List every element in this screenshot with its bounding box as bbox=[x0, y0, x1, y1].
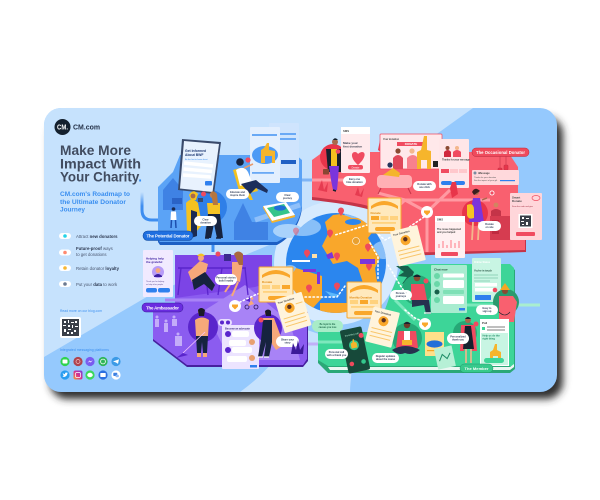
donation form: top bbox=[368, 198, 401, 233]
background card bbox=[44, 108, 557, 392]
green callout bubble: causes you love bbox=[319, 327, 337, 329]
bubble: map: journey bbox=[282, 197, 293, 200]
bubble: form: sign up bbox=[483, 310, 492, 313]
bubble: form: Easy to bbox=[483, 307, 492, 310]
crowd silhouettes bbox=[155, 316, 182, 346]
card: helping help bbox=[143, 250, 173, 297]
bubble: map: Clear bbox=[284, 194, 291, 197]
message card: Thanks for your donation bbox=[474, 176, 496, 179]
woman with hat bbox=[493, 283, 519, 322]
bubble: sofa: Donate with bbox=[417, 183, 432, 186]
globe halo bbox=[274, 201, 398, 325]
card shadow bbox=[50, 117, 563, 399]
bubble: sofa bbox=[413, 181, 436, 191]
panel: the member bbox=[318, 258, 519, 373]
shop counter bbox=[490, 203, 510, 240]
phone card: donation bbox=[439, 139, 471, 188]
green callout bubble: Be loyal to the bbox=[320, 323, 336, 326]
bubble: ambassador bbox=[276, 336, 299, 347]
message card: iMessage bbox=[478, 171, 490, 175]
donor with bag bbox=[320, 138, 346, 191]
road bbox=[165, 298, 235, 302]
messaging platform icons bbox=[60, 357, 121, 380]
title: Impact With bbox=[60, 156, 141, 171]
panel: potential donator bbox=[158, 123, 303, 245]
card: first donation: Donate bbox=[352, 166, 360, 170]
bubble: form bbox=[476, 305, 498, 315]
plant bbox=[396, 266, 414, 284]
plants bbox=[318, 140, 388, 197]
campaign cards bbox=[250, 123, 299, 183]
panel: occasional donator bbox=[312, 127, 542, 258]
icon: rcs bbox=[73, 357, 83, 366]
bubble: form bbox=[194, 216, 217, 226]
icon: twitter bbox=[60, 370, 70, 380]
smart donate card: Scan the code and give bbox=[512, 205, 534, 208]
toggle pill bbox=[218, 319, 232, 326]
donors in conversation bbox=[186, 191, 223, 238]
road bbox=[318, 300, 515, 342]
bubble: table: build loyalty bbox=[219, 280, 234, 282]
message card: See the impact of your gift bbox=[474, 179, 498, 182]
card: bottom SMS: and you helped bbox=[437, 231, 456, 234]
phone call bbox=[340, 326, 371, 374]
green note bbox=[434, 345, 456, 370]
title: Make More bbox=[60, 143, 131, 158]
label: the member bbox=[460, 364, 493, 372]
globe bbox=[286, 208, 386, 313]
profile card: left: Your Donation bbox=[277, 297, 295, 305]
card: bottom SMS: The issue happened bbox=[437, 228, 462, 231]
campaign poster: Your donation bbox=[383, 138, 400, 141]
volunteer with broom bbox=[176, 308, 218, 358]
clouds bbox=[286, 214, 386, 272]
bubble: ambassador: Share your bbox=[281, 338, 294, 342]
icon: whatsapp bbox=[98, 357, 108, 366]
roads bbox=[312, 180, 541, 252]
title: Your Charity. bbox=[60, 170, 142, 184]
campaign poster: DONATE bbox=[405, 142, 417, 146]
title bbox=[60, 143, 142, 184]
seated phone man bbox=[402, 274, 432, 314]
bubble: mobile: Donate bbox=[485, 223, 494, 226]
subtitle bbox=[60, 191, 130, 213]
card: helping help: the grateful bbox=[146, 260, 163, 264]
label: the occasional donator bbox=[472, 148, 529, 156]
message card bbox=[472, 170, 519, 185]
continent: africa and eurasia bbox=[322, 214, 380, 288]
bubble: form: Clear bbox=[202, 218, 209, 222]
small walking person bbox=[170, 207, 176, 228]
heart badge: bottom bbox=[419, 318, 431, 330]
continent: south bbox=[320, 303, 346, 313]
reclining donor on sofa bbox=[377, 162, 412, 194]
cyclist bbox=[245, 296, 258, 309]
donation form: monthly bbox=[347, 282, 381, 318]
goal: future-proof: Future-proof ways bbox=[76, 246, 113, 251]
QR code bbox=[60, 317, 81, 338]
seated donor bbox=[233, 157, 268, 200]
label: the potential donator: The Potential Donator bbox=[146, 234, 190, 239]
goal: retain: Retain donator loyalty bbox=[76, 266, 120, 271]
bubble: reading: about the cause bbox=[376, 358, 396, 361]
woman in red jacket bbox=[453, 317, 478, 363]
bubble: reading bbox=[372, 353, 399, 363]
bubble: phone: with a thank you bbox=[327, 354, 347, 357]
bubble: first donation bbox=[343, 176, 366, 186]
form tablet bbox=[178, 139, 221, 194]
subtitle: CM.com's Roadmap to bbox=[60, 191, 130, 198]
mountain bbox=[205, 285, 300, 360]
bubble: phone bbox=[325, 349, 348, 359]
card: poll: Help us do the bbox=[482, 334, 500, 338]
form card bbox=[472, 258, 501, 302]
bubble: story: Educate and bbox=[230, 191, 245, 194]
profile card: top: Your Donation bbox=[393, 230, 410, 237]
bubble: story: inspire them bbox=[230, 194, 246, 197]
goal: data: Put your data to work bbox=[76, 282, 118, 287]
goal: future-proof: to get donations bbox=[76, 252, 107, 257]
inland sea bbox=[345, 219, 361, 225]
chat card: Become an advocate bbox=[225, 328, 250, 330]
dotted journey paths bbox=[236, 217, 424, 322]
smart donate card bbox=[510, 193, 542, 240]
label: the member: The Member bbox=[464, 366, 489, 371]
goal list bbox=[59, 233, 120, 287]
small figure on road bbox=[450, 182, 458, 198]
campaign poster bbox=[380, 134, 442, 169]
label: the occasional donator: The Occasional Donator bbox=[476, 150, 525, 155]
logo: CM.com bbox=[73, 123, 100, 132]
chat card bbox=[222, 325, 259, 369]
platforms heading: Integrated messaging platforms bbox=[60, 348, 109, 352]
plant bbox=[291, 340, 304, 354]
icon: google business bbox=[98, 370, 108, 380]
icon: instagram bbox=[74, 370, 82, 380]
card: first donation bbox=[341, 127, 370, 173]
profile card: top bbox=[390, 225, 426, 267]
bubble: poster: thank-you bbox=[452, 338, 464, 342]
icon: imessage bbox=[85, 370, 95, 380]
card: helping help: us help other people bbox=[146, 283, 163, 286]
map pins bbox=[293, 208, 372, 293]
profile card: left bbox=[275, 292, 312, 333]
logo: CM. bbox=[57, 124, 68, 132]
bubble: story bbox=[226, 189, 249, 199]
goal: future-proof bbox=[59, 246, 113, 257]
green callout bubble bbox=[312, 320, 343, 332]
house silhouettes bbox=[163, 178, 268, 240]
donation form: monthly: Monthly Donation bbox=[350, 296, 373, 300]
card: first donation: Make your bbox=[343, 141, 359, 145]
donation form: left: Donate bbox=[262, 280, 272, 284]
bubble: mobile: on site bbox=[485, 226, 494, 229]
road bbox=[255, 205, 300, 220]
subtitle: the Ultimate Donator bbox=[60, 199, 127, 206]
chat card bbox=[431, 265, 467, 313]
donation form: left bbox=[259, 267, 293, 302]
smart donate card: Donate bbox=[512, 199, 522, 203]
heart badge: top bbox=[421, 206, 433, 218]
card: helping help: Thank you for helping bbox=[146, 280, 164, 283]
subtitle: Journey bbox=[60, 206, 86, 213]
bubble: top bbox=[390, 290, 412, 300]
icon: telegram bbox=[111, 357, 121, 366]
woman with phone bbox=[462, 189, 494, 240]
logo bbox=[54, 119, 100, 135]
label: the potential donator bbox=[143, 231, 193, 240]
connector pipes bbox=[142, 122, 540, 344]
card: bottom SMS bbox=[435, 216, 465, 258]
form tablet: Be the first to know about bbox=[185, 158, 208, 161]
blog link: Read more on our blog.com bbox=[60, 309, 102, 313]
smart donate card: Smart bbox=[512, 196, 520, 200]
continent: americas bbox=[294, 268, 322, 308]
profile card: bottom bbox=[365, 306, 400, 348]
label: the ambassador bbox=[142, 303, 183, 312]
phone card: donation: Thanks for your message bbox=[442, 160, 471, 162]
goal: attract: Attract new donators bbox=[76, 234, 118, 239]
form card: Online Status bbox=[474, 261, 491, 264]
bubble: map bbox=[276, 192, 299, 202]
label: the ambassador: The Ambassador bbox=[146, 305, 179, 310]
bubble: top: Personal bbox=[396, 292, 407, 295]
table group bbox=[178, 252, 248, 296]
form card: You're in touch bbox=[474, 270, 492, 272]
globe vignettes bbox=[292, 238, 375, 298]
yellow poster bbox=[425, 332, 444, 356]
isometric map bbox=[263, 202, 295, 223]
card: poll: Poll bbox=[482, 321, 487, 325]
bubble: first donation: Easy one bbox=[349, 178, 361, 181]
card: helping help: Helping help bbox=[146, 256, 164, 260]
bubble: reading: Regular updates bbox=[376, 355, 396, 358]
donation form: top: Donate bbox=[370, 211, 381, 215]
card: poll: right thing bbox=[482, 338, 495, 340]
cloud bbox=[273, 224, 303, 238]
form tablet: Get Informed bbox=[185, 149, 206, 153]
card: bottom SMS: SMS bbox=[437, 218, 443, 222]
form tablet: About BWF bbox=[185, 153, 203, 157]
bubble: form: donation bbox=[200, 222, 211, 224]
blue circle behind donors bbox=[193, 190, 227, 224]
chat card: Chat now bbox=[434, 268, 448, 272]
bubble: mobile bbox=[478, 221, 501, 231]
profile card: bottom: Your Donation bbox=[374, 310, 392, 317]
bubble: poster: Personalized bbox=[450, 336, 466, 338]
icon: messenger bbox=[85, 357, 95, 366]
bubble: sofa: one click bbox=[419, 186, 430, 189]
upper violet zone bbox=[175, 255, 272, 298]
bubble: poster bbox=[447, 333, 469, 344]
card: poll bbox=[480, 319, 509, 366]
bubble: first donation: time donation bbox=[346, 181, 363, 184]
card: first donation: SMS bbox=[343, 129, 349, 133]
bubble: table: Personal stories bbox=[216, 276, 236, 280]
sitting man reading bbox=[392, 322, 422, 354]
phone call: Incoming call bbox=[345, 332, 359, 338]
card: first donation: first donation bbox=[343, 144, 362, 148]
bubble: phone: Personal call bbox=[329, 351, 345, 354]
panel: ambassador bbox=[153, 252, 308, 369]
heart badge: left bbox=[229, 300, 241, 312]
icon: sms bbox=[60, 357, 70, 366]
bubble: top: journeys bbox=[395, 295, 407, 298]
cloaked ambassador bbox=[254, 310, 284, 357]
hanging lamps bbox=[498, 156, 508, 173]
bubble: ambassador: story bbox=[284, 342, 291, 344]
icon: chat bbox=[111, 370, 121, 380]
bubble: table bbox=[215, 274, 237, 285]
